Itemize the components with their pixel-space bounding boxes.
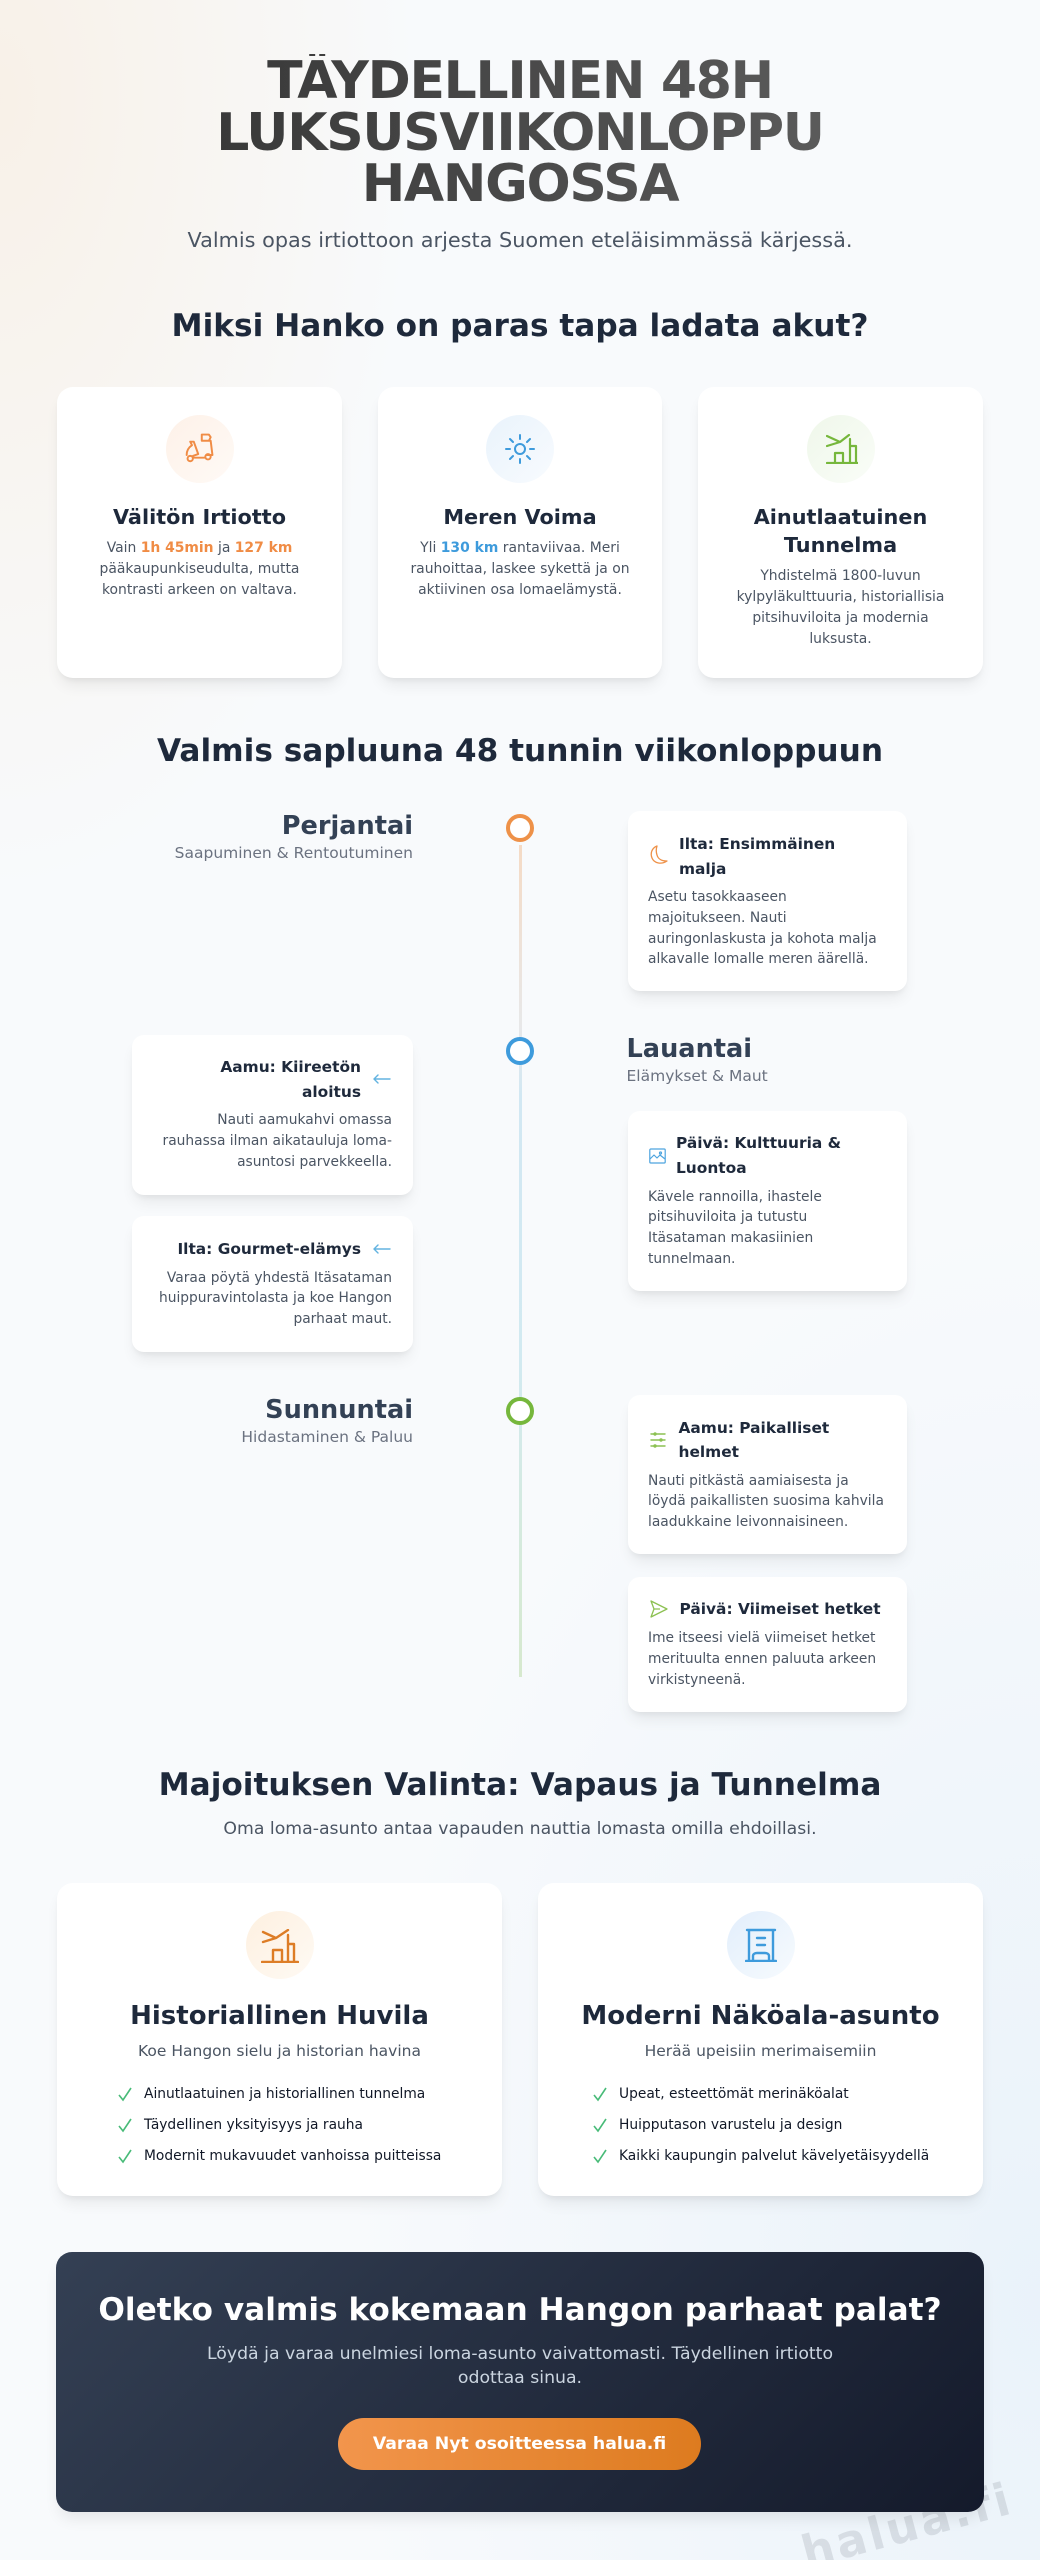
icon: sun [486,415,554,483]
card title: Päivä: Viimeiset hetket [680,1600,881,1618]
day heading: Sunnuntai [241,1395,413,1446]
card text: pääkaupunkiseudulta, mutta [100,561,299,577]
card heading [754,505,927,556]
CTA button: Varaa Nyt osoitteessa halua.fi [373,2434,666,2454]
icon: building [727,1911,795,1979]
card text: tunnelmaan. [648,1251,735,1267]
card text: Asetu tasokkaaseen [648,889,787,905]
card text [100,540,299,598]
title: TÄYDELLINEN 48H [267,51,773,111]
header: title and subtitle [188,51,852,252]
card text: Ime itseesi vielä viimeiset hetket [648,1630,875,1646]
card text: luksusta. [809,630,872,646]
feature list [118,2086,441,2164]
card heading: Ainutlaatuinen [754,505,927,529]
card text: majoitukseen. Nauti [648,910,787,926]
card text: alkavalle lomalle meren äärellä. [648,951,869,967]
card title: Luontoa [676,1158,747,1176]
card text: rauhoittaa, laskee sykettä ja on [410,561,630,577]
card text: Kävele rannoilla, ihastele [648,1189,822,1205]
card heading: Historiallinen Huvila [130,2001,429,2031]
check icon [118,2088,132,2102]
panel: Päivä Viimeiset hetket [628,1577,907,1712]
card heading: Välitön Irtiotto [113,505,286,529]
card text: huippuravintolasta ja koe Hangon [159,1290,392,1306]
day heading: Sunnuntai: Sunnuntai [265,1395,413,1425]
card text: Nauti pitkästä aamiaisesta ja [648,1473,849,1489]
feature text: Täydellinen yksityisyys ja rauha [144,2117,363,2133]
panel: Ainutlaatuinen Tunnelma [698,387,983,678]
day heading: Perjantai: Perjantai [282,811,413,841]
panel: Ilta Ensimmäinen malja [628,811,907,991]
card text [648,1473,884,1530]
heading: why Hanko: Miksi Hanko on paras tapa ladata akut? [172,308,868,344]
heading: timeline: Valmis sapluuna 48 tunnin viikonloppuun [157,733,883,769]
icon: moon [650,845,668,864]
card text [159,1270,392,1327]
card text: aktiivinen osa lomaelämystä. [418,582,622,598]
card text: pitsihuviloita ja tutustu [648,1209,807,1225]
CTA text: odottaa sinua. [458,2368,582,2388]
check icon [118,2118,132,2132]
feature text: Upeat, esteettömät merinäköalat [619,2086,849,2102]
check icon [118,2150,132,2164]
card text: Varaa pöytä yhdestä Itäsataman [167,1270,392,1286]
card text: löydä paikallisten suosima kahvila [648,1493,884,1509]
card title: Ilta: Ensimmäinen [679,835,835,853]
panel: Välitön Irtiotto [57,387,342,678]
icon: windmill [246,1911,314,1979]
subtitle: Valmis opas irtiottoon arjesta Suomen eteläisimmässä kärjessä. [188,228,852,252]
card title: Ilta: Gourmet-elämys [177,1240,361,1258]
card subheading: Herää upeisiin merimaisemiin [645,2042,876,2060]
node: Perjantai [506,814,534,842]
card title [676,1134,841,1176]
panel: Päivä Kulttuuria ja Luontoa [628,1111,907,1291]
title [0,54,1040,210]
check icon [594,2088,607,2102]
CTA button [338,2418,701,2470]
panel: Moderni Näköala-asunto [538,1883,983,2196]
accommodation subtitle: Oma loma-asunto antaa vapauden nauttia lomasta omilla ehdoillasi. [223,1819,817,1839]
icon: arrow left [373,1244,391,1254]
card title: malja [679,860,726,878]
day heading: Lauantai: Lauantai [626,1034,752,1064]
day heading: Perjantai [175,811,413,862]
feature text: Kaikki kaupungin palvelut kävelyetäisyydellä [619,2148,929,2164]
card text [163,1112,392,1170]
card text: laadukkaine leivonnaisineen. [648,1514,848,1530]
check icon [594,2150,607,2164]
icon: paper plane [650,1600,668,1618]
card subheading: Koe Hangon sielu ja historian havina [138,2042,421,2060]
card title [678,1418,829,1461]
CTA text [207,2344,833,2388]
day heading: Perjantai: Saapuminen & Rentoutuminen [175,844,413,862]
card heading: Moderni Näköala-asunto [581,2001,940,2031]
card text: Itäsataman makasiinien [648,1230,813,1246]
card text [648,1630,876,1688]
card title: Aamu: Paikalliset [678,1418,829,1436]
card text: virkistyneenä. [648,1672,746,1688]
day heading: Lauantai [626,1034,768,1085]
card title: Aamu: Kiireetön [220,1058,361,1076]
card text: asuntosi parvekkeella. [237,1154,392,1170]
card text: pitsihuviloita ja modernia [752,610,929,626]
feature text: Ainutlaatuinen ja historiallinen tunnelma [144,2086,425,2102]
CTA heading: Oletko valmis kokemaan Hangon parhaat palat? [98,2292,942,2328]
day heading: Lauantai: Elämykset & Maut [626,1067,768,1085]
feature text: Modernit mukavuudet vanhoissa puitteissa [144,2148,441,2164]
feature text: Huipputason varustelu ja design [619,2117,842,2133]
feature list [594,2086,929,2164]
card text [410,540,630,598]
panel: Aamu Kiireetön aloitus [132,1035,413,1195]
card title: helmet [678,1443,739,1461]
title: HANGOSSA [362,154,678,214]
day heading: Sunnuntai: Hidastaminen & Paluu [241,1428,413,1446]
card title: aloitus [302,1082,361,1100]
title: LUKSUSVIIKONLOPPU [216,102,824,162]
card text [648,1189,822,1267]
card title [220,1058,361,1100]
card text [737,568,944,646]
icon: sliders [650,1432,666,1448]
card text: Yhdistelmä 1800-luvun [760,568,921,584]
card text: auringonlaskusta ja kohota malja [648,931,877,947]
CTA text: Löydä ja varaa unelmiesi loma-asunto vaivattomasti. Täydellinen irtiotto [207,2344,833,2364]
icon: windmill [806,415,874,483]
panel: Meren Voima [378,387,662,678]
card text [648,889,877,967]
panel: Historiallinen Huvila [57,1883,502,2196]
card text: merituulta ennen paluuta arkeen [648,1651,876,1667]
node: Sunnuntai [506,1397,534,1425]
card text: kylpyläkulttuuria, historiallisia [737,588,944,604]
timeline line [518,845,522,1677]
node: Lauantai [506,1037,534,1065]
card text: kontrasti arkeen on valtava. [102,582,297,598]
card text: rauhassa ilman aikatauluja loma- [163,1133,392,1149]
panel: Ilta Gourmet-elämys [132,1216,413,1352]
card text: Yli 130 km rantaviivaa. Meri [420,540,620,556]
card heading: Meren Voima [443,505,597,529]
card title [679,835,835,878]
check icon [594,2118,607,2132]
card heading: Tunnelma [784,532,897,556]
call to action panel [56,2252,984,2512]
card text: parhaat maut. [293,1311,392,1327]
icon: scooter [166,415,234,483]
icon: arrow left [373,1074,391,1084]
card text: Vain 1h 45min ja 127 km [107,540,292,556]
card title: Päivä: Kulttuuria & [676,1134,841,1152]
heading: accommodation: Majoituksen Valinta: Vapaus ja Tunnelma [159,1767,881,1803]
icon: picture [649,1148,666,1164]
panel: Aamu Paikalliset helmet [628,1395,907,1554]
card text: Nauti aamukahvi omassa [217,1112,392,1128]
